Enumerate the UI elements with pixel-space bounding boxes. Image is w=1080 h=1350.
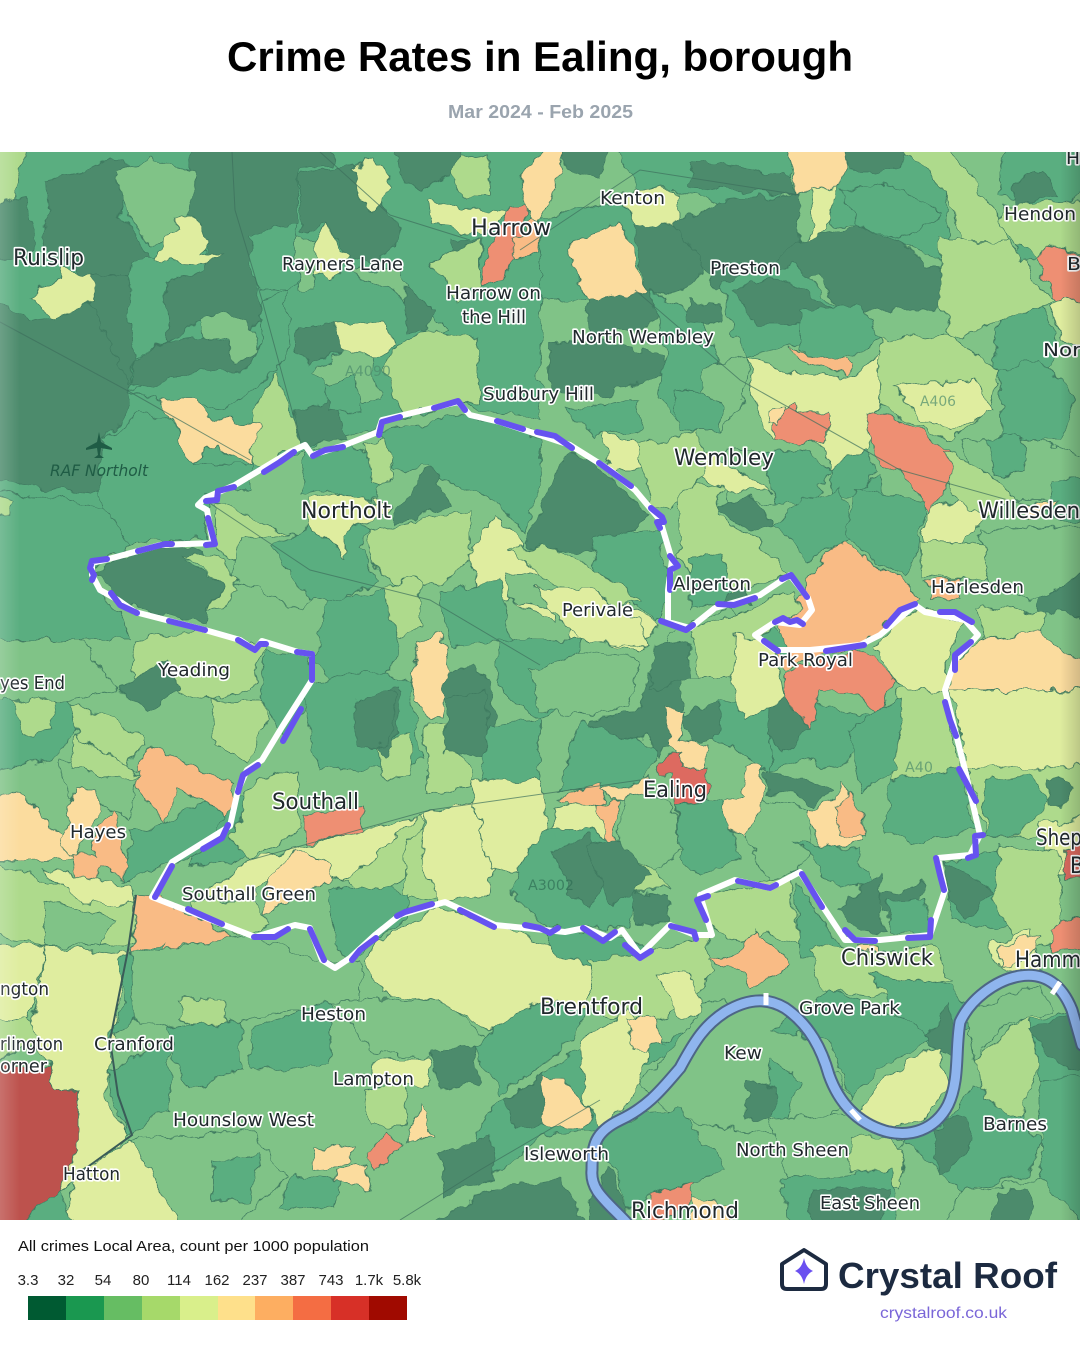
map xyxy=(0,152,1080,1220)
road labels: A3002 xyxy=(528,878,574,894)
place name labels: Nor xyxy=(1043,340,1080,361)
place name labels: Ruislip xyxy=(13,246,84,271)
place name labels: Harlesden xyxy=(931,577,1024,598)
place name labels: Yeading xyxy=(157,660,230,681)
place name labels: Wembley xyxy=(674,446,774,471)
icon: house with star xyxy=(782,1250,826,1289)
place name labels: Chiswick xyxy=(841,946,933,971)
place name labels: Hounslow West xyxy=(173,1110,314,1131)
legend values: 743 xyxy=(318,1272,344,1289)
place name labels: Sudbury Hill xyxy=(483,384,594,405)
place name labels: Hatton xyxy=(63,1164,120,1185)
legend values: 162 xyxy=(204,1272,230,1289)
logo wordmark: Crystal Roof xyxy=(838,1255,1058,1296)
River Thames xyxy=(592,975,1080,1222)
subtitle: Mar 2024 - Feb 2025 xyxy=(448,102,633,122)
place name labels: Harrow on xyxy=(446,283,541,304)
road labels: A40 xyxy=(905,760,933,776)
legend values: 3.3 xyxy=(18,1272,38,1289)
icon: RAF Northolt plane xyxy=(86,432,112,458)
place name labels: Southall Green xyxy=(182,884,316,905)
legend xyxy=(18,1238,422,1320)
place name labels: North Wembley xyxy=(572,327,714,348)
place name labels: North Sheen xyxy=(736,1140,849,1161)
place name labels: Perivale xyxy=(562,600,633,621)
place name labels: the Hill xyxy=(462,307,526,328)
place name labels: Lampton xyxy=(333,1069,414,1090)
legend values: 5.8k xyxy=(393,1272,422,1289)
Heavy boundary west of Cranford xyxy=(75,895,136,1176)
place name labels: Ealing xyxy=(643,778,707,803)
place name labels: Northolt xyxy=(301,499,391,524)
place name labels: rlington xyxy=(0,1034,63,1055)
place name labels: Park Royal xyxy=(758,650,853,671)
place name labels: Hayes xyxy=(70,822,126,843)
place name labels: yes End xyxy=(0,673,65,694)
map base xyxy=(0,152,1080,1220)
legend values: 1.7k xyxy=(355,1272,384,1289)
road labels xyxy=(345,364,956,894)
place name labels: Heston xyxy=(301,1004,366,1025)
legend values: 237 xyxy=(242,1272,268,1289)
logo url: crystalroof.co.uk xyxy=(880,1305,1008,1322)
place name labels: Kew xyxy=(724,1043,762,1064)
place name labels: Cranford xyxy=(94,1034,174,1055)
legend values: 114 xyxy=(167,1272,191,1289)
road labels: A4090 xyxy=(345,364,391,380)
place name labels: Grove Park xyxy=(799,998,901,1019)
place name labels: Kenton xyxy=(600,188,665,209)
place name labels: Preston xyxy=(710,258,780,279)
place name labels: Isleworth xyxy=(524,1144,609,1165)
place name labels: East Sheen xyxy=(820,1193,920,1214)
place name labels: Brentford xyxy=(540,995,643,1020)
place name labels: Southall xyxy=(272,790,359,815)
title: Crime Rates in Ealing, borough xyxy=(227,33,853,80)
place name labels: Hendon xyxy=(1004,204,1076,225)
Ealing borough boundary xyxy=(90,401,983,968)
label: RAF Northolt: RAF Northolt xyxy=(50,461,149,480)
legend colour swatches xyxy=(28,1296,407,1320)
legend values xyxy=(18,1272,422,1289)
place name labels xyxy=(0,148,1080,1224)
road and boundary lines xyxy=(0,152,1080,1220)
legend values: 387 xyxy=(280,1272,306,1289)
place name labels: Rayners Lane xyxy=(282,254,403,275)
legend values: 32 xyxy=(58,1272,74,1289)
place name labels: Barnes xyxy=(983,1114,1047,1135)
place name labels: B xyxy=(1067,254,1080,275)
legend values: 80 xyxy=(133,1272,149,1289)
place name labels: Harrow xyxy=(471,216,551,241)
place name labels: ngton xyxy=(0,979,49,1000)
place name labels: orner xyxy=(0,1056,48,1077)
legend values: 54 xyxy=(95,1272,111,1289)
road labels: A406 xyxy=(920,394,956,410)
legend title: All crimes Local Area, count per 1000 population xyxy=(18,1238,369,1255)
place name labels: Alperton xyxy=(673,574,751,595)
